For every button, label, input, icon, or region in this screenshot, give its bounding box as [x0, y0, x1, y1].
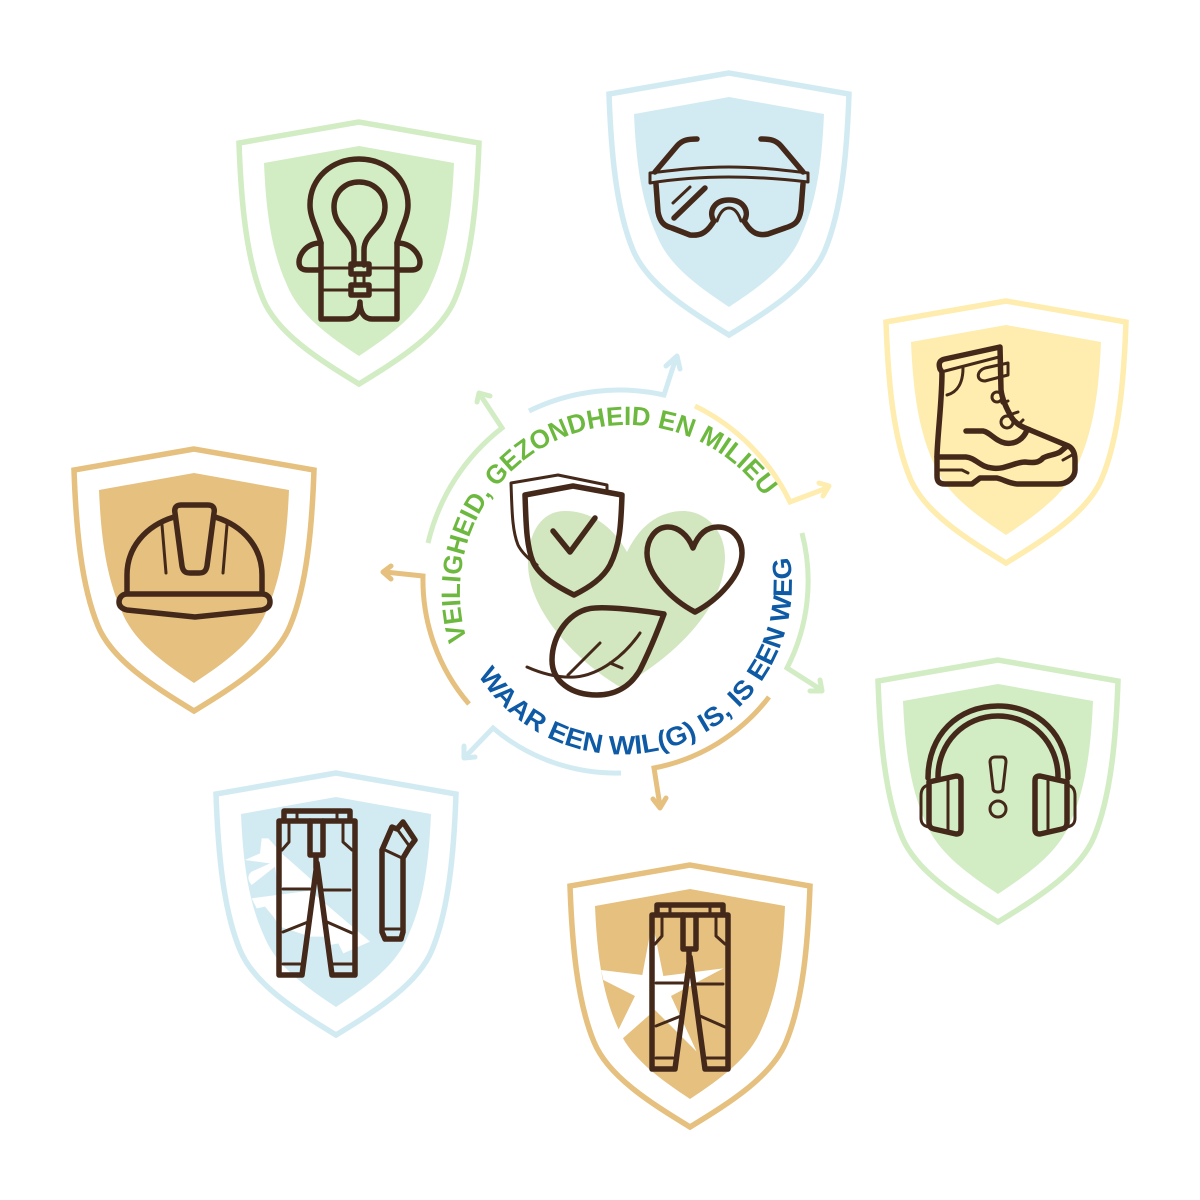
shield frame	[216, 773, 456, 1035]
icon: shield with check	[511, 475, 622, 595]
icon: safety goggles	[650, 139, 808, 235]
shield frame	[239, 122, 479, 384]
icon: work trousers	[279, 811, 355, 975]
panel: central emblem	[380, 354, 832, 810]
panel: work trousers star shield	[570, 865, 810, 1127]
ring arrow: blue top	[529, 356, 680, 411]
heading: blue curved text: WAAR EEN WIL(G) IS, IS EEN WEG	[480, 558, 792, 754]
panel: trousers and sleeve shield	[216, 773, 456, 1035]
shield frame	[74, 449, 314, 711]
icon: heart outline	[647, 527, 742, 612]
shield frame	[609, 73, 849, 335]
panel: safety goggles shield	[609, 73, 849, 335]
shield frame	[570, 865, 810, 1127]
icon: hard hat	[119, 505, 270, 617]
hand and plane cut-out	[245, 838, 370, 953]
star cut-out	[601, 922, 723, 1052]
heading: green curved text: VEILIGHEID, GEZONDHEID EN MILIEU	[442, 406, 778, 644]
ring arrow: blue lower left	[464, 728, 621, 773]
ring arrow: green lower right	[787, 533, 822, 691]
icon: safety boot	[937, 347, 1075, 484]
icon: sleeve	[382, 822, 415, 939]
shield frame	[886, 301, 1126, 563]
panel: safety boot shield	[886, 301, 1126, 563]
icon: life vest	[299, 159, 420, 319]
ring arrow: tan bottom	[653, 697, 769, 808]
panel: hard hat shield	[74, 449, 314, 711]
icon: leaf	[527, 608, 664, 695]
shield frame	[878, 660, 1118, 922]
icon: ear defenders	[921, 706, 1075, 834]
icon: work trousers	[652, 905, 728, 1069]
ring arrow: yellow right	[695, 406, 829, 502]
icon: green heart background	[528, 511, 725, 687]
panel: life vest shield	[239, 122, 479, 384]
ring arrow: green top left	[428, 393, 502, 543]
panel: ear protection shield	[878, 660, 1118, 922]
ring arrow: tan left	[383, 566, 469, 704]
